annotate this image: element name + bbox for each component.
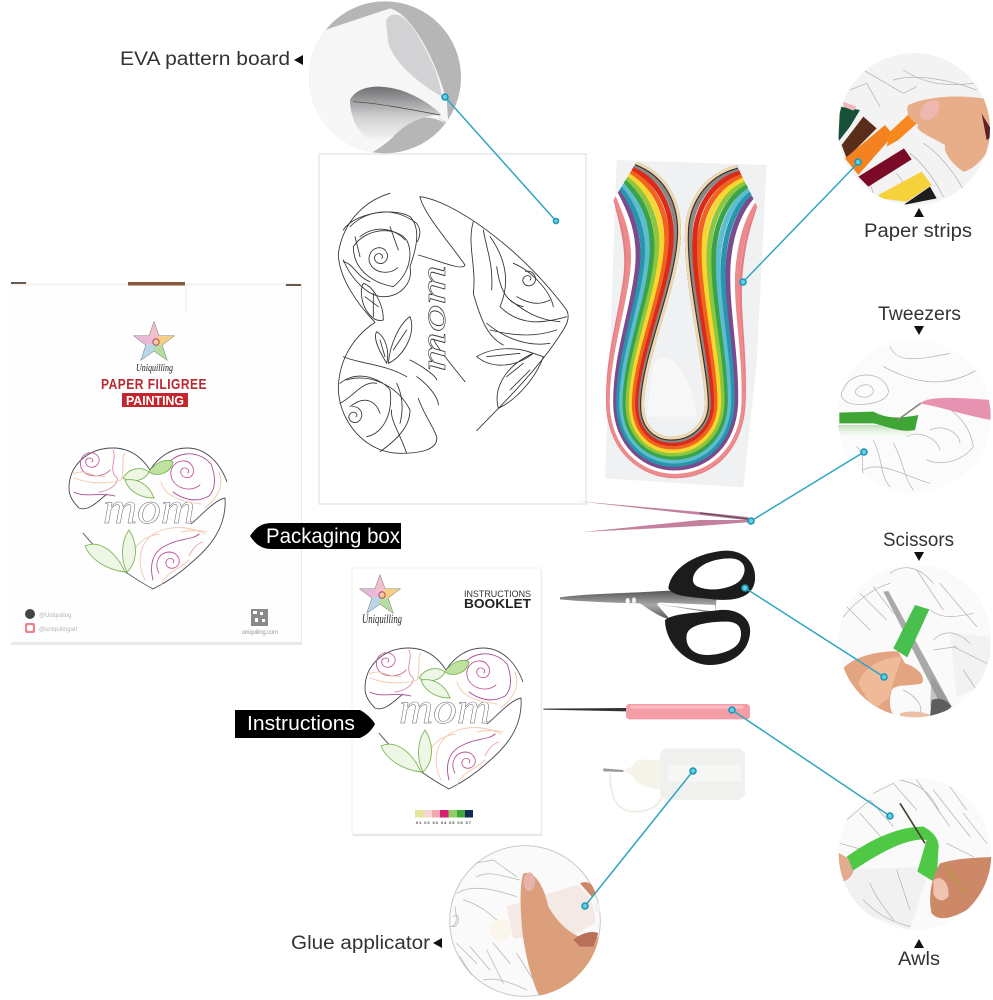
icon: tweezers arrow	[914, 326, 924, 335]
label: scissors: Scissors	[883, 530, 954, 551]
circle: paper strips photo	[838, 53, 990, 205]
circle: EVA board photo	[309, 1, 461, 154]
booklet heading: INSTRUCTIONS	[464, 589, 531, 600]
box heart artwork	[69, 448, 227, 589]
label: glue applicator: Glue applicator	[291, 933, 431, 954]
booklet logo star	[360, 575, 400, 613]
connector: EVA board	[442, 94, 558, 224]
booklet heart artwork	[365, 648, 523, 789]
box title: PAPER FILIGREE	[101, 376, 207, 393]
label: tweezers: Tweezers	[878, 304, 961, 325]
booklet heading: BOOKLET	[464, 596, 531, 611]
box logo: star	[134, 322, 174, 360]
rotated heart line drawing	[338, 193, 568, 453]
icon: awls arrow	[914, 939, 924, 948]
icon: glue arrow	[433, 938, 442, 948]
circle: awls photo	[838, 780, 992, 930]
connector: awl	[729, 707, 893, 819]
box social icons: @Uniquiling	[39, 613, 71, 619]
icon: scissors arrow	[914, 552, 924, 561]
label: packaging box: Packaging box	[266, 525, 400, 548]
label: paper strips: Paper strips	[864, 221, 972, 242]
panel: paper strips in bag	[605, 160, 767, 487]
box social icons	[25, 609, 78, 633]
box logo text: Uniquilling	[136, 362, 173, 374]
tweezers tool	[576, 501, 751, 532]
connector: scissors	[742, 585, 887, 680]
box social icons: @uniquilingart	[39, 627, 78, 633]
colour swatches	[415, 810, 473, 825]
circle: scissors photo	[843, 567, 990, 718]
label: awls: Awls	[898, 949, 940, 970]
panel: instructions booklet	[352, 568, 542, 836]
rotated heart line drawing: mom	[414, 265, 453, 372]
icon: paper strips arrow	[914, 208, 924, 217]
circle: tweezers photo	[838, 346, 991, 490]
panel: EVA pattern board	[319, 154, 586, 504]
colour swatches: 01 02 03 04 05 06 07	[416, 820, 472, 825]
awl tool	[543, 704, 750, 719]
scissors tool	[560, 551, 755, 665]
circle: glue applicator photo	[449, 845, 601, 997]
connector: tweezers	[748, 449, 867, 524]
icon: EVA arrow	[294, 55, 303, 65]
connector: paper strips	[740, 159, 861, 285]
box QR code: uniquiling.com	[242, 630, 278, 636]
connector: glue	[582, 768, 696, 909]
label: EVA pattern board: EVA pattern board	[120, 49, 290, 70]
label: instructions	[235, 710, 375, 738]
label: instructions: Instructions	[247, 712, 355, 735]
glue bottle tool	[603, 748, 745, 812]
box QR code	[242, 609, 278, 636]
box subtitle badge: PAINTING	[126, 393, 184, 408]
booklet heading	[464, 589, 531, 611]
panel: packaging box	[10, 282, 302, 645]
booklet logo text: Uniquilling	[362, 611, 402, 626]
